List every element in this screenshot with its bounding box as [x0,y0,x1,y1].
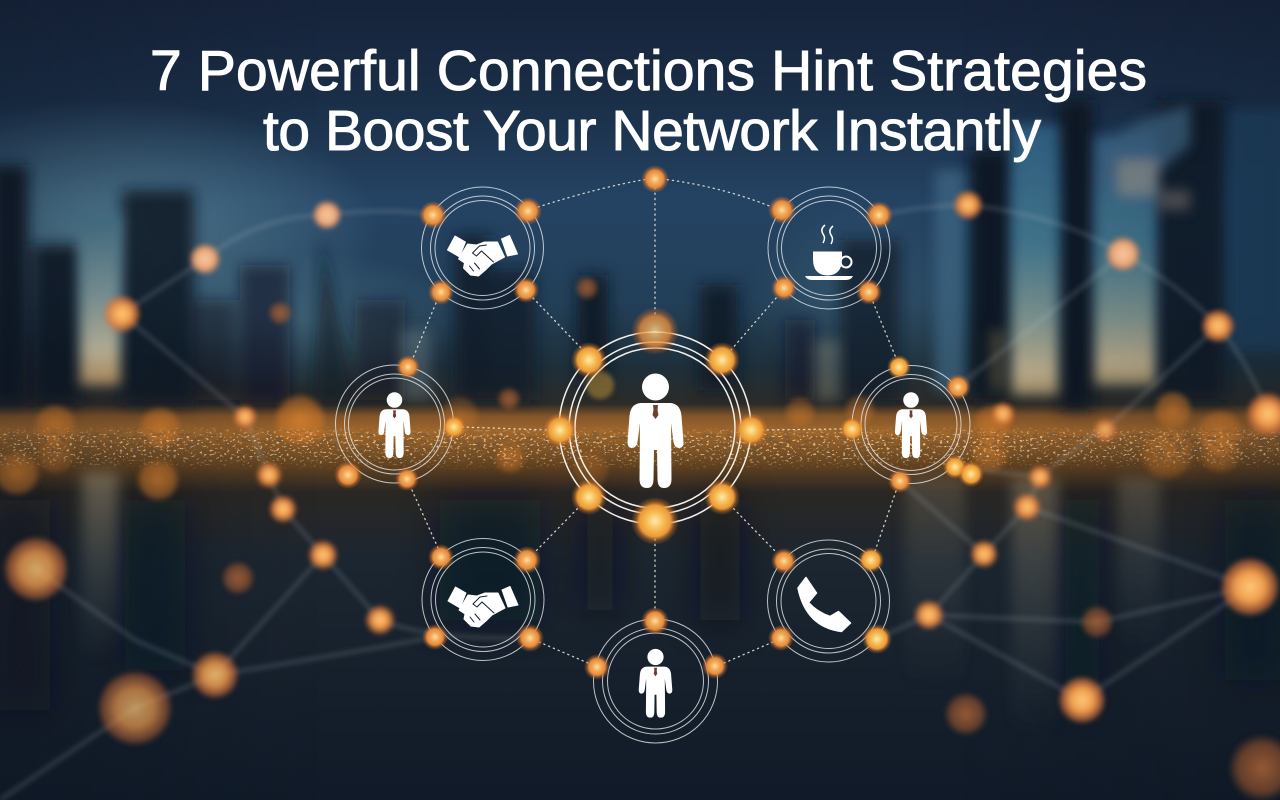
icon: person [378,392,411,458]
hub rings [559,332,751,524]
title: to Boost Your Network Instantly [263,99,1042,163]
bright tower columns [80,105,1280,400]
orange horizon blobs [0,390,1244,502]
outer network: bokeh nodes [3,190,1280,800]
panel: coffee top right [768,187,893,309]
icon: handshake [448,236,518,276]
panel: phone bottom right [768,540,892,662]
icon: person [895,392,927,458]
panel: handshake bottom left [422,538,544,660]
panel: person bottom [584,607,728,743]
icon: central person [628,374,684,488]
hub nodes [543,307,768,545]
reflections [0,500,1280,710]
dotted connection lines [412,179,896,663]
panel: person right [840,355,984,493]
outer network: faint blurred links [0,205,1268,800]
icon: handshake [448,586,518,627]
panel: person left [334,355,466,491]
icon: phone [798,578,850,632]
node: top connector [641,165,669,193]
icon: coffee cup [805,225,853,280]
icon: person [639,649,672,718]
centre hub [543,307,768,545]
panel: handshake top left [419,187,544,309]
title [150,39,1147,163]
title: 7 Powerful Connections Hint Strategies [150,39,1147,103]
